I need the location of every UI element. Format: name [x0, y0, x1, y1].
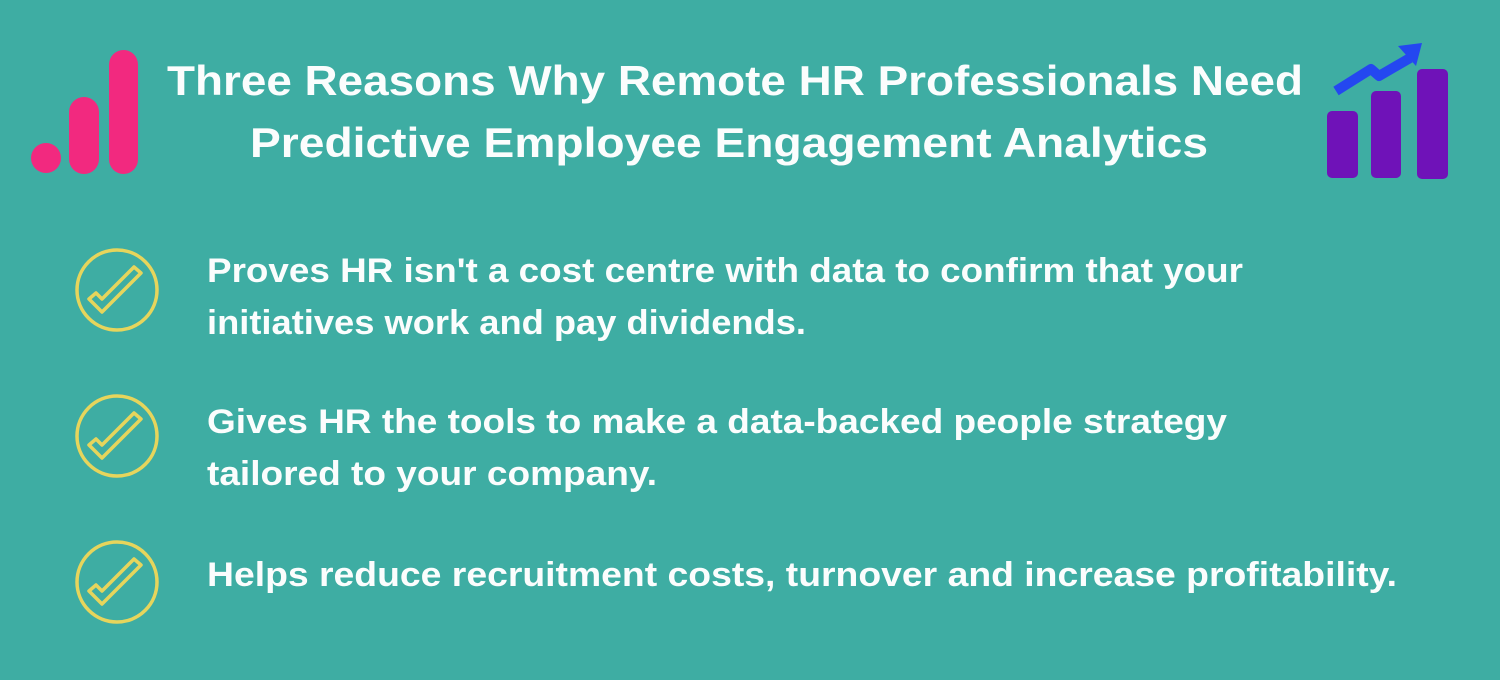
icon: purple growth chart — [1327, 43, 1448, 179]
item 3 — [77, 542, 1397, 622]
item 1: initiatives work and pay dividends. — [207, 304, 806, 342]
icon: check circle 1 — [77, 250, 157, 330]
item 2 — [77, 396, 1227, 493]
item 1 — [77, 250, 1243, 342]
title: Predictive Employee Engagement Analytics — [250, 119, 1208, 166]
icon: check circle 2 — [77, 396, 157, 476]
item 2: tailored to your company. — [207, 455, 657, 493]
title: Three Reasons Why Remote HR Professionals Need — [167, 57, 1303, 104]
item 3: Helps reduce recruitment costs, turnover and increase profitability. — [207, 556, 1397, 594]
icon: check circle 3 — [77, 542, 157, 622]
item 1: Proves HR isn't a cost centre with data to confirm that your — [207, 252, 1243, 290]
item 2: Gives HR the tools to make a data-backed people strategy — [207, 403, 1227, 441]
icon: pink bar chart — [31, 50, 138, 174]
title — [167, 57, 1303, 166]
